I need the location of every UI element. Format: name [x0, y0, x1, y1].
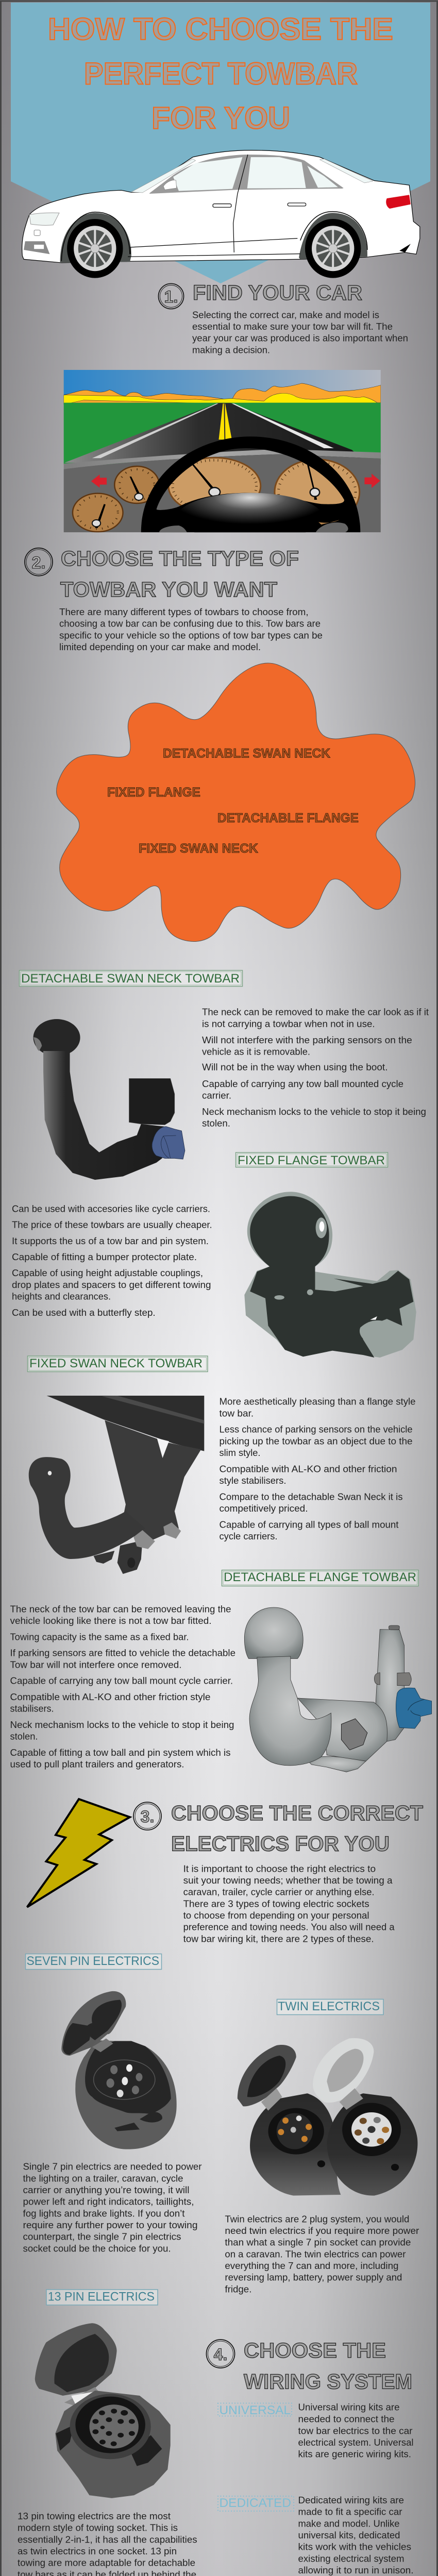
text: detachable flange benefits: Capable of fitting a tow ball and pin system which is — [10, 1748, 231, 1758]
text: fixed flange benefits: drop plates and spacers to get different towing — [12, 1280, 211, 1290]
text: dedicated description — [298, 2495, 413, 2575]
text: fixed flange benefits: Capable of using height adjustable couplings, — [12, 1268, 203, 1278]
text: universal description: electrical system. Universal — [298, 2437, 413, 2448]
text: seven pin description: socket could be the choice for you. — [23, 2243, 171, 2253]
text: dedicated description: Dedicated wiring kits are — [298, 2495, 404, 2505]
section 2 number badge — [25, 548, 53, 576]
text: detachable flange benefits: If parking sensors are fitted to vehicle the detachable — [10, 1648, 235, 1658]
text: fixed swan neck benefits: slim style. — [220, 1448, 261, 1458]
section 2 heading: CHOOSE THE TYPE OF — [61, 547, 299, 570]
text: twin electrics description: Twin electrics are 2 plug system, you would — [225, 2214, 409, 2224]
text: seven pin description: fog lights and brake lights. If you don’t — [23, 2208, 184, 2218]
text: dedicated description: kits work with the vehicles — [298, 2542, 411, 2552]
section 4 heading: CHOOSE THE — [244, 2338, 386, 2362]
text: fixed flange benefits: The price of these towbars are usually cheaper. — [12, 1220, 212, 1230]
section 3 body text: preference and towing needs. You also will need a — [183, 1922, 395, 1933]
title: HOW TO CHOOSE THE — [48, 12, 393, 46]
text: detachable swan neck benefits: Will not be in the way when using the boot. — [202, 1062, 388, 1073]
text: detachable swan neck benefits: vehicle as it is removable. — [202, 1046, 310, 1057]
text: detachable swan neck benefits: carrier. — [202, 1091, 231, 1101]
section 1 number badge — [159, 283, 183, 309]
label: detachable flange: DETACHABLE FLANGE — [217, 811, 359, 825]
section 3 body text — [183, 1863, 395, 1944]
heading box: seven pin electrics: SEVEN PIN ELECTRICS — [27, 1954, 159, 1968]
text: detachable flange benefits: stabilisers. — [10, 1704, 54, 1714]
image: detachable swan neck towbar — [33, 1019, 185, 1180]
section 1 body text: year your car was produced is also important when — [192, 333, 408, 344]
section 4 number badge: 4. — [214, 2345, 227, 2364]
text: detachable flange benefits: vehicle looking like there is not a tow bar fitted. — [10, 1616, 212, 1626]
image: fixed swan neck towbar — [29, 1396, 204, 1574]
text: 13 pin description: 13 pin towing electrics are the most — [18, 2511, 171, 2521]
section 3 body text: caravan, trailer, cycle carrier or anything else. — [183, 1887, 375, 1897]
text: 13 pin description: essentially 2-in-1, it has all the capabilities — [18, 2534, 197, 2545]
section 3 heading: CHOOSE THE CORRECT — [171, 1801, 423, 1825]
text: fixed swan neck benefits: More aesthetically pleasing than a flange style — [220, 1397, 415, 1407]
heading box: fixed flange towbar: FIXED FLANGE TOWBAR — [238, 1154, 385, 1167]
text: detachable swan neck benefits: Capable of carrying any tow ball mounted cycle — [202, 1079, 403, 1089]
header banner — [11, 3, 430, 283]
text: detachable flange benefits — [10, 1604, 235, 1770]
image: 13 pin socket — [35, 2323, 171, 2498]
text: seven pin description: counterpart, the single 7 pin electrics — [23, 2232, 181, 2242]
title: PERFECT TOWBAR — [84, 57, 358, 91]
section 1 number badge: 1. — [164, 287, 178, 306]
section 2 body text: specific to your vehicle so the options of tow bar types can be — [59, 630, 323, 640]
section 1 heading: FIND YOUR CAR — [193, 281, 362, 304]
image: seven pin socket — [61, 1991, 177, 2149]
section 1 body text: Selecting the correct car, make and model is — [192, 310, 379, 320]
icon: lightning bolt — [27, 1799, 130, 1907]
image: detachable flange towbar — [244, 1607, 432, 1772]
text: fixed swan neck benefits: tow bar. — [220, 1408, 254, 1418]
heading box: twin electrics: TWIN ELECTRICS — [278, 1999, 380, 2013]
text: universal description — [298, 2402, 413, 2460]
text: fixed flange benefits: Can be used with accesories like cycle carriers. — [12, 1204, 210, 1214]
text: twin electrics description: need twin electrics if you require more power — [225, 2226, 419, 2236]
text: detachable flange benefits: Compatible with AL-KO and other friction style — [10, 1692, 210, 1702]
illustration: road view from driver's seat — [64, 370, 381, 541]
text: fixed swan neck benefits: style stabilisers. — [220, 1476, 287, 1486]
text: detachable swan neck benefits: Neck mechanism locks to the vehicle to stop it being — [202, 1107, 426, 1117]
text: detachable swan neck benefits: stolen. — [202, 1118, 230, 1129]
text: fixed flange benefits: Capable of fitting a bumper protector plate. — [12, 1252, 197, 1262]
text: dedicated description: existing electrical system — [298, 2553, 404, 2564]
text: dedicated description: made to fit a specific car — [298, 2507, 402, 2517]
text: fixed swan neck benefits: Capable of carrying all types of ball mount — [220, 1519, 399, 1530]
text: fixed swan neck benefits: competitively priced. — [220, 1503, 308, 1514]
label: dedicated wiring kit: DEDICATED — [220, 2496, 291, 2510]
text: fixed swan neck benefits: Compare to the detachable Swan Neck it is — [220, 1492, 403, 1502]
text: fixed swan neck benefits: Compatible with AL-KO and other friction — [220, 1464, 397, 1474]
text: fixed swan neck benefits: picking up the towbar as an object due to the — [220, 1436, 412, 1446]
text: fixed swan neck benefits — [220, 1397, 415, 1541]
title: FOR YOU — [151, 101, 290, 135]
text: universal description: needed to connect the — [298, 2414, 395, 2425]
text: seven pin description: Single 7 pin electrics are needed to power — [23, 2162, 202, 2172]
text: universal description: Universal wiring kits are — [298, 2402, 400, 2412]
text: 13 pin description: modern style of towing socket. This is — [18, 2523, 178, 2533]
text: fixed flange benefits: heights and clearances. — [12, 1292, 111, 1302]
text: detachable flange benefits: stolen. — [10, 1732, 38, 1742]
text: dedicated description: universal kits, dedicated — [298, 2530, 400, 2540]
section 2 heading — [60, 547, 299, 601]
section 2 number badge: 2. — [32, 553, 45, 572]
text: seven pin description: carrier or anything you’re towing, it will — [23, 2185, 190, 2195]
text: seven pin description — [23, 2162, 202, 2253]
image: twin electrics sockets — [238, 2038, 417, 2196]
section 2 body text: limited depending on your car make and model. — [59, 642, 261, 652]
text: dedicated description: make and model. Unlike — [298, 2518, 400, 2529]
section 2 body text — [59, 607, 323, 652]
section 3 number badge: 3. — [141, 1807, 154, 1826]
heading box: detachable swan neck towbar: DETACHABLE SWAN NECK TOWBAR — [21, 972, 240, 986]
section 4 heading — [244, 2338, 412, 2394]
label: fixed swan neck: FIXED SWAN NECK — [139, 841, 258, 856]
text: fixed flange benefits — [12, 1204, 212, 1318]
text: twin electrics description — [225, 2214, 419, 2294]
text: fixed flange benefits: It supports the us of a tow bar and pin system. — [12, 1236, 209, 1246]
text: universal description: kits are generic wiring kits. — [298, 2449, 411, 2460]
image: fixed flange towbar — [244, 1192, 416, 1358]
text: detachable flange benefits: Towing capacity is the same as a fixed bar. — [10, 1632, 189, 1642]
section 3 body text: suit your towing needs; whether that be towing a — [183, 1875, 393, 1886]
panel: towbar types splat — [57, 663, 415, 942]
heading box: detachable flange towbar: DETACHABLE FLANGE TOWBAR — [224, 1570, 416, 1584]
title — [48, 12, 393, 135]
heading box: 13 pin electrics: 13 PIN ELECTRICS — [48, 2290, 155, 2304]
label: fixed flange: FIXED FLANGE — [107, 785, 200, 800]
text: fixed swan neck benefits: cycle carriers. — [220, 1531, 277, 1541]
text: detachable swan neck benefits: Will not interfere with the parking sensors on the — [202, 1035, 412, 1045]
section 3 heading — [171, 1801, 423, 1856]
text: seven pin description: the lighting on a trailer, caravan, cycle — [23, 2173, 183, 2183]
text: detachable flange benefits: Capable of carrying any tow ball mount cycle carrier. — [10, 1676, 233, 1686]
text: seven pin description: require any further power to your towing — [23, 2220, 198, 2230]
section 3 body text: to choose from depending on your personal — [183, 1910, 369, 1921]
text: twin electrics description: reversing lamp, battery, power supply and — [225, 2273, 402, 2283]
section 1 body text — [192, 310, 408, 355]
label: detachable swan neck: DETACHABLE SWAN NECK — [163, 746, 330, 760]
text: detachable flange benefits: Neck mechanism locks to the vehicle to stop it being — [10, 1720, 234, 1730]
text: detachable flange benefits: The neck of the tow bar can be removed leaving the — [10, 1604, 231, 1614]
section 3 body text: It is important to choose the right electrics to — [183, 1863, 376, 1874]
section 2 heading: TOWBAR YOU WANT — [60, 578, 277, 601]
section 1 body text: making a decision. — [192, 345, 270, 355]
text: 13 pin description: towing are more adaptable for detachable — [18, 2558, 195, 2568]
text: twin electrics description: fridge. — [225, 2284, 251, 2294]
section 3 body text: There are 3 types of towing electric sockets — [183, 1899, 369, 1909]
section 2 body text: There are many different types of towbars to choose from, — [59, 607, 309, 617]
section 4 heading: WIRING SYSTEM — [244, 2370, 412, 2394]
text: dedicated description: allowing it to run in unison. — [298, 2565, 413, 2575]
text: detachable swan neck benefits — [202, 1007, 429, 1129]
label: universal wiring kit: UNIVERSAL — [220, 2403, 291, 2417]
text: twin electrics description: on a caravan. The twin electrics can power — [225, 2249, 406, 2259]
text: detachable swan neck benefits: The neck can be removed to make the car look as if it — [202, 1007, 429, 1018]
text: detachable swan neck benefits: is not carrying a towbar when not in use. — [202, 1019, 375, 1029]
text: fixed swan neck benefits: Less chance of parking sensors on the vehicle — [220, 1425, 412, 1435]
section 1 body text: essential to make sure your tow bar will fit. The — [192, 321, 393, 332]
text: twin electrics description: than what a single 7 pin socket can provide — [225, 2238, 411, 2248]
heading box: fixed swan neck towbar: FIXED SWAN NECK TOWBAR — [29, 1357, 203, 1370]
text: universal description: tow bar electrics to the car — [298, 2426, 412, 2436]
section 2 body text: choosing a tow bar can be confusing due to this. Tow bars are — [59, 619, 321, 629]
text: detachable flange benefits: used to pull plant trailers and generators. — [10, 1759, 184, 1770]
text: 13 pin description — [18, 2511, 197, 2576]
text: seven pin description: power left and right indicators, taillights, — [23, 2197, 194, 2207]
text: fixed flange benefits: Can be used with a butterfly step. — [12, 1308, 156, 1318]
text: twin electrics description: everything the 7 can and more, including — [225, 2261, 398, 2271]
section 4 number badge — [206, 2340, 235, 2368]
section 3 number badge — [133, 1802, 161, 1830]
illustration: white saloon car side view — [22, 150, 420, 278]
section 3 heading: ELECTRICS FOR YOU — [171, 1832, 390, 1856]
section 3 body text: tow bar wiring kit, there are 2 types of these. — [183, 1934, 374, 1944]
text: detachable flange benefits: Tow bar will not interfere once removed. — [10, 1659, 181, 1670]
text: 13 pin description: as twin electrics in one socket. 13 pin — [18, 2546, 177, 2556]
